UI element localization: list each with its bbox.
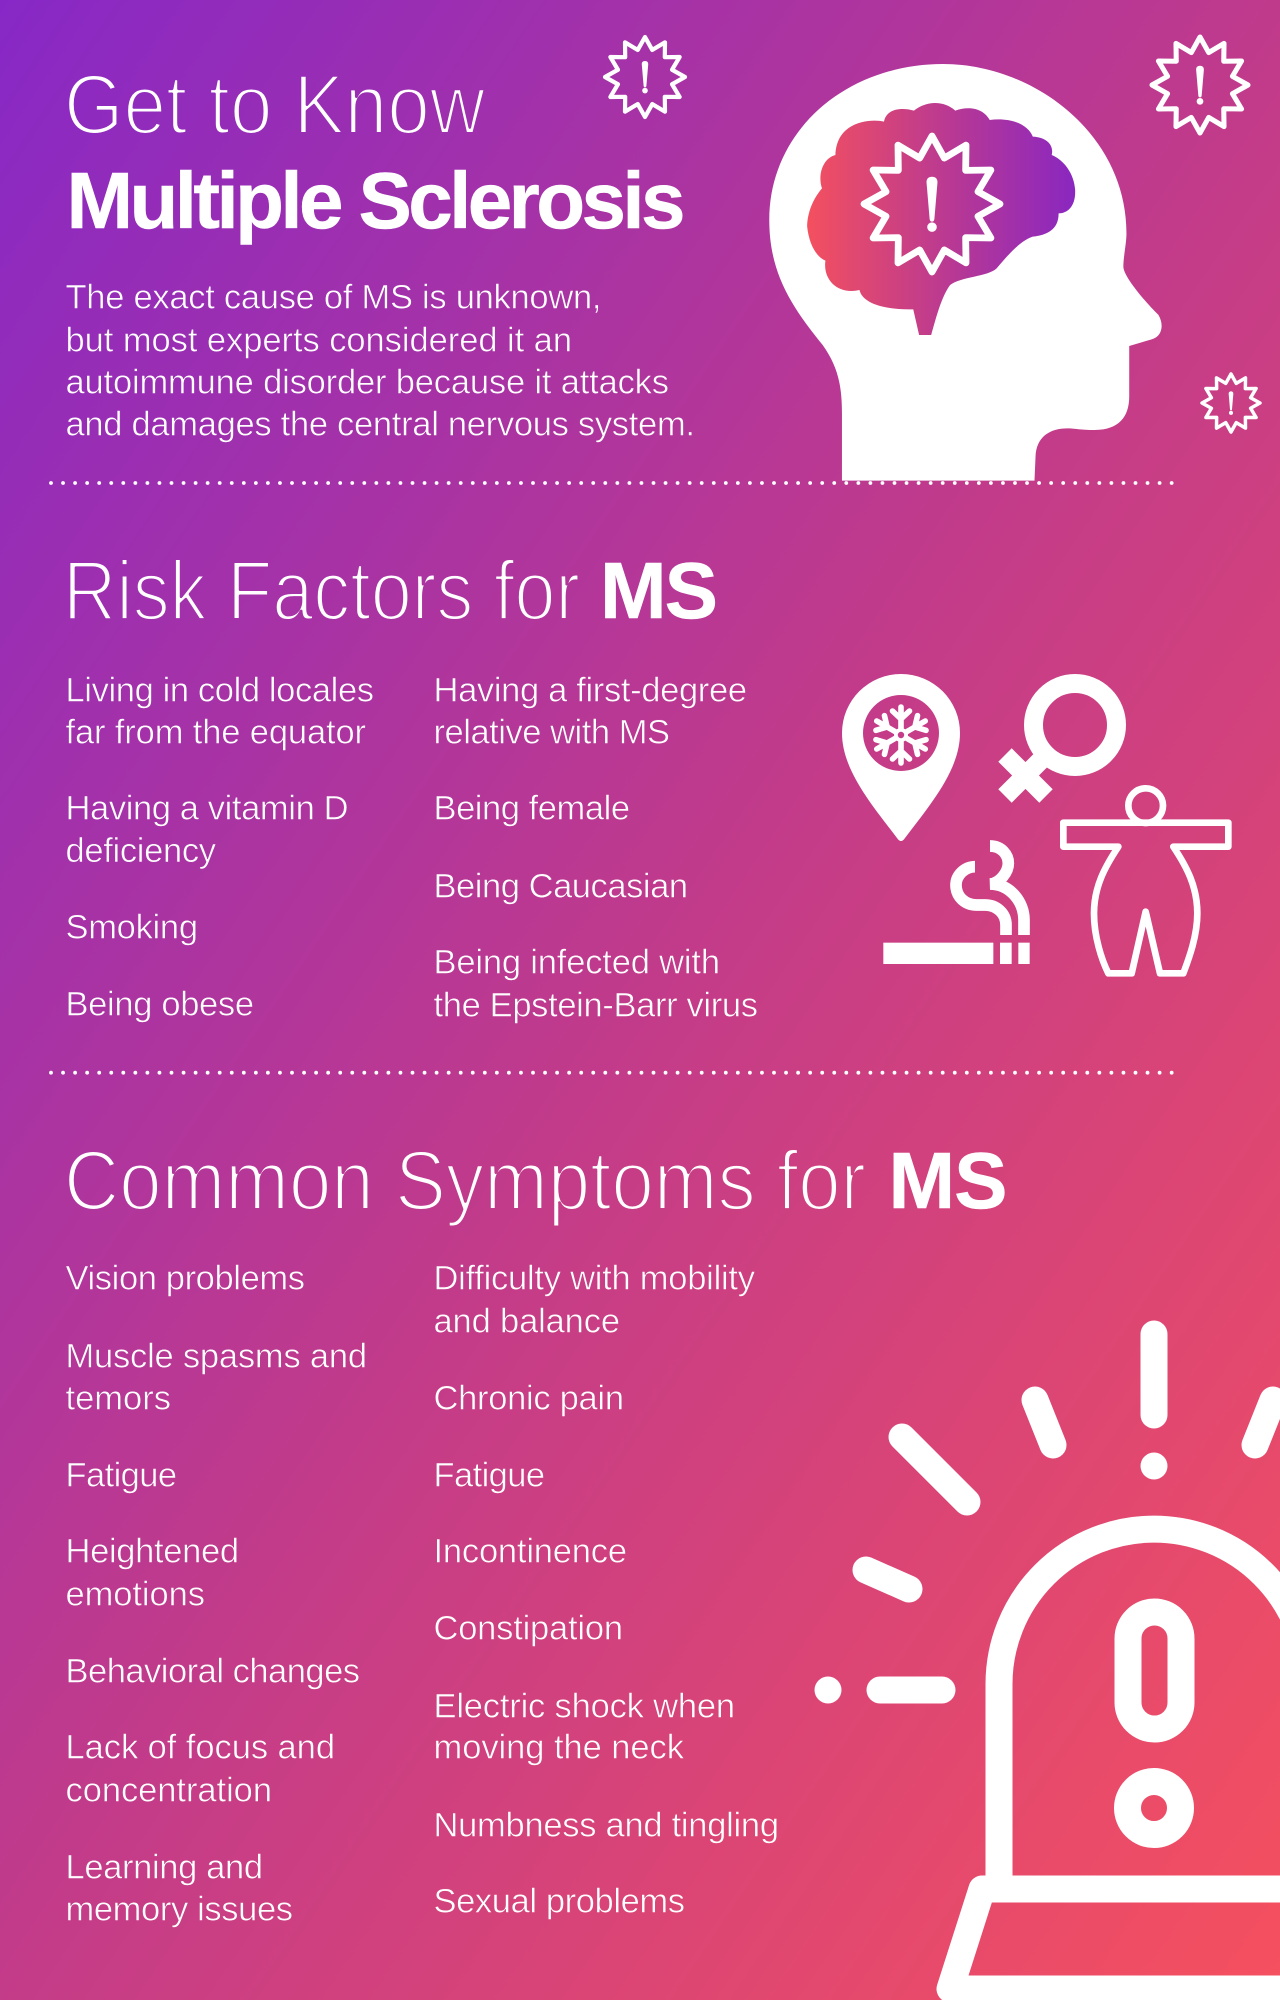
list: symptoms right column: Incontinence (434, 1533, 627, 1571)
icon: head with brain (769, 64, 1162, 481)
list: symptoms right column: Sexual problems (434, 1883, 685, 1921)
panel: risk factors (63, 544, 1228, 1025)
list: symptoms right column: Constipation (434, 1610, 623, 1648)
list: symptoms left column: concentration (66, 1772, 272, 1810)
list: risk factors left column: Smoking (66, 909, 198, 947)
heading: Common Symptoms for MS: Common Symptoms for (64, 1134, 866, 1228)
dotted divider (51, 1071, 1173, 1075)
siren dots (814, 1452, 1168, 1704)
icon: warning star top right (1152, 37, 1248, 133)
list: symptoms right column: Numbness and tingling (434, 1807, 779, 1845)
siren dome and base (950, 1529, 1280, 1989)
heading: Common Symptoms for MS: MS (888, 1136, 1008, 1225)
list: symptoms right column: and balance (434, 1303, 620, 1341)
list: risk factors left column: Living in cold locales (66, 672, 374, 710)
list: symptoms right column: moving the neck (434, 1729, 685, 1767)
icon: warning star lower right (1202, 374, 1260, 432)
intro paragraph: autoimmune disorder because it attacks (66, 364, 669, 402)
icon: cigarette with smoke (883, 846, 1030, 964)
list: symptoms right column: Electric shock when (434, 1688, 735, 1726)
icon: female symbol (1005, 684, 1116, 796)
siren light rays (866, 1334, 1273, 1690)
list: risk factors left column: deficiency (66, 832, 217, 870)
title: Get to Know: Get to Know (64, 58, 485, 152)
list: risk factors right column: Being infected with (434, 944, 720, 982)
list: symptoms left column: emotions (66, 1576, 205, 1614)
list: symptoms left column: temors (66, 1380, 171, 1418)
intro paragraph: and damages the central nervous system. (66, 406, 695, 444)
intro paragraph (66, 279, 695, 444)
list: symptoms right column: Chronic pain (434, 1380, 624, 1418)
list: risk factors right column: Being Caucasian (434, 868, 688, 906)
list: risk factors left column: far from the equator (66, 714, 366, 752)
list: symptoms left column: memory issues (66, 1891, 293, 1929)
heading: Risk Factors for MS: Risk Factors for (63, 544, 580, 638)
intro paragraph: The exact cause of MS is unknown, (66, 279, 602, 317)
intro paragraph: but most experts considered it an (66, 322, 572, 360)
icon: alarm siren (814, 1334, 1280, 1989)
warning star inside brain (864, 136, 1000, 272)
list: symptoms right column (434, 1260, 779, 1921)
title: Multiple Sclerosis: Multiple Sclerosis (66, 156, 686, 245)
heading: Risk Factors for MS: MS (600, 546, 718, 635)
list: symptoms left column: Lack of focus and (66, 1729, 335, 1767)
list: risk factors right column: relative with MS (434, 714, 670, 752)
list: symptoms left column: Heightened (66, 1533, 239, 1571)
list: symptoms left column: Vision problems (66, 1260, 305, 1298)
icon: warning star top middle (605, 37, 685, 117)
panel: common symptoms (64, 1134, 1280, 1989)
list: risk factors right column: Being female (434, 790, 630, 828)
siren exclamation mark (1128, 1612, 1181, 1834)
list: risk factors right column: Having a first-degree (434, 672, 747, 710)
brain (807, 103, 1075, 335)
panel: introduction (64, 37, 1260, 444)
head silhouette (769, 64, 1162, 481)
list: symptoms left column: Behavioral changes (66, 1653, 360, 1691)
list: risk factors right column (434, 672, 758, 1025)
list: symptoms right column: Fatigue (434, 1457, 545, 1495)
list: symptoms right column: Difficulty with mobility (434, 1260, 756, 1298)
list: symptoms left column: Muscle spasms and (66, 1338, 367, 1376)
list: risk factors right column: the Epstein-Barr virus (434, 987, 758, 1025)
icon: obese body outline (1063, 788, 1228, 973)
list: symptoms left column (66, 1260, 367, 1929)
list: symptoms left column: Fatigue (66, 1457, 177, 1495)
icon: location pin with snowflake (842, 674, 960, 841)
list: risk factors left column: Having a vitamin D (66, 790, 348, 828)
list: symptoms left column: Learning and (66, 1849, 263, 1887)
dotted divider (51, 481, 1173, 485)
list: risk factors left column (66, 672, 374, 1024)
list: risk factors left column: Being obese (66, 986, 254, 1024)
